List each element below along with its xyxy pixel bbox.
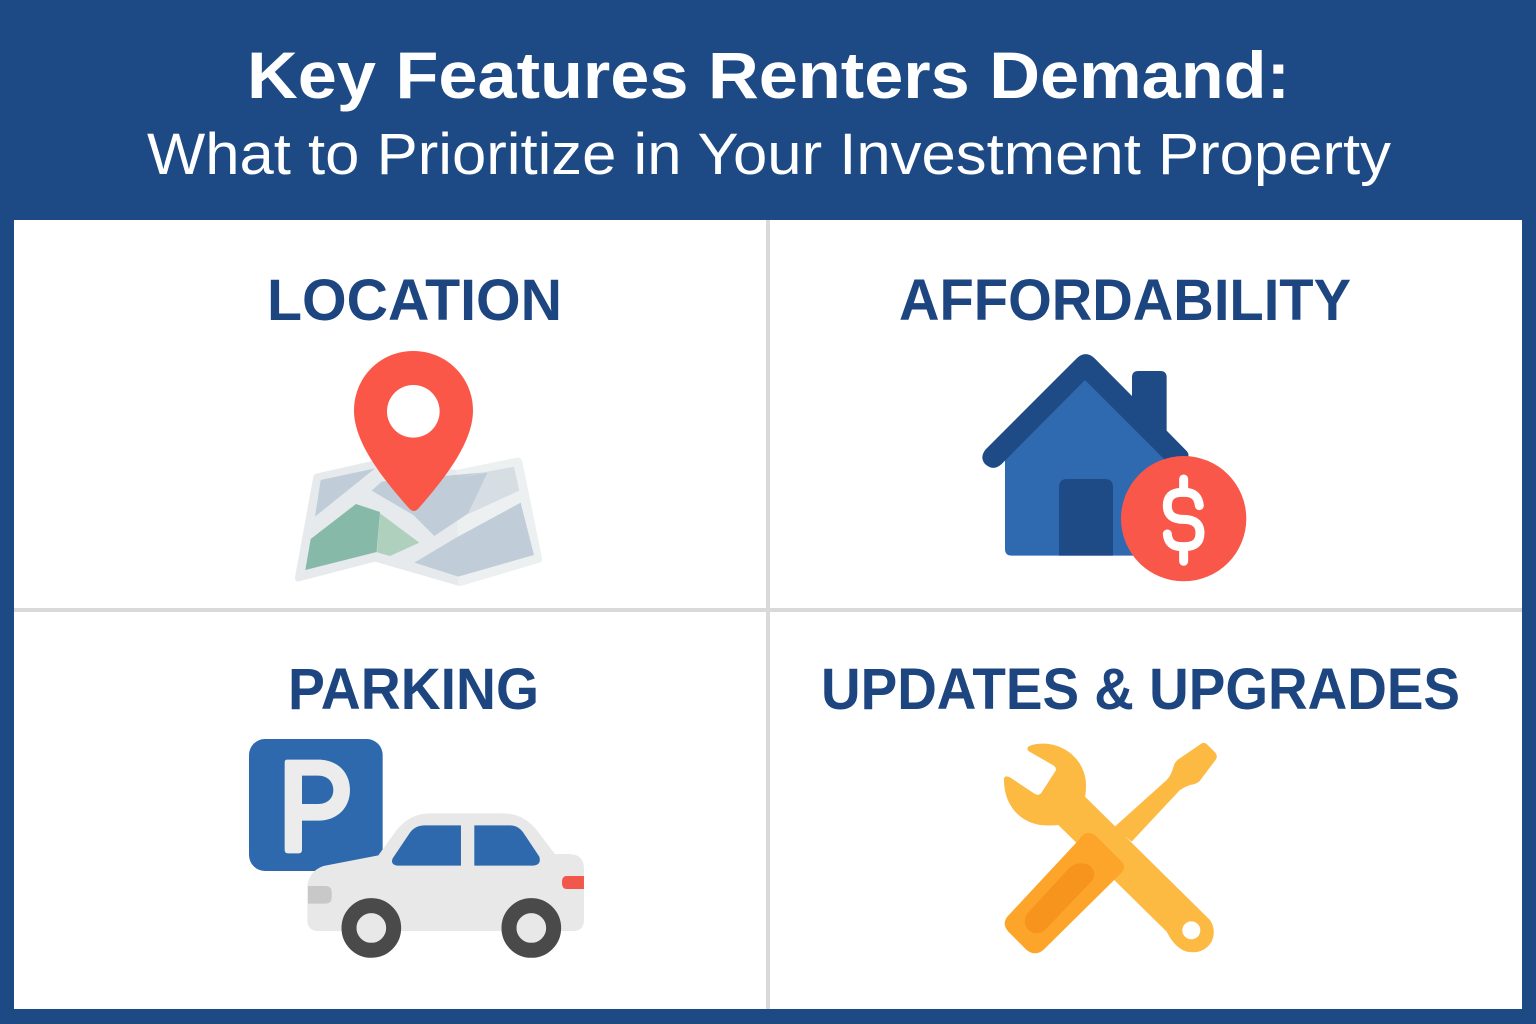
icon: map with pin bbox=[295, 351, 542, 586]
heading: updates and upgrades: UPDATES & UPGRADES bbox=[821, 657, 1460, 722]
title bbox=[147, 38, 1391, 187]
title: Key Features Renters Demand: bbox=[247, 38, 1290, 112]
panel: updates and upgrades bbox=[821, 657, 1460, 953]
heading: parking: PARKING bbox=[288, 657, 539, 722]
icon: house with dollar coin bbox=[982, 354, 1246, 581]
icon: wrench and screwdriver bbox=[1004, 743, 1217, 953]
panel: white grid background bbox=[14, 220, 1522, 1009]
title: What to Prioritize in Your Investment Property bbox=[147, 122, 1391, 187]
panel: affordability bbox=[899, 268, 1351, 581]
heading: location: LOCATION bbox=[267, 268, 562, 333]
panel: location bbox=[267, 268, 562, 586]
heading: affordability: AFFORDABILITY bbox=[899, 268, 1351, 333]
panel: parking bbox=[249, 657, 584, 950]
icon: parking sign and car bbox=[249, 739, 584, 950]
